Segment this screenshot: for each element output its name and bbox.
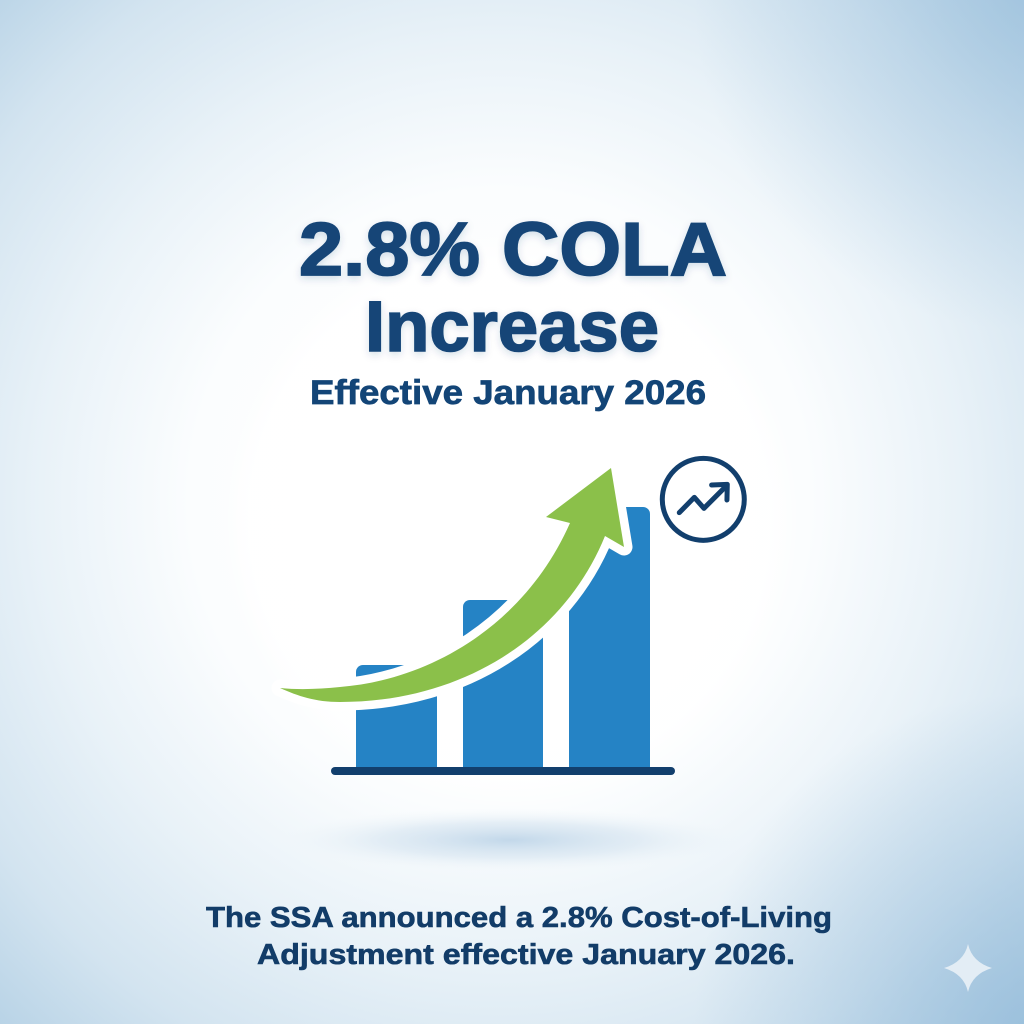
soft white glow behind chart: [220, 230, 800, 810]
bar 3: [569, 507, 650, 767]
icon: sparkle: [944, 944, 992, 992]
bottom-right corner tint: [694, 694, 1024, 1024]
caption line 1: The SSA announced a 2.8% Cost-of-Living: [206, 902, 832, 934]
caption line 2: Adjustment effective January 2026.: [257, 939, 795, 971]
title line 2: Increase: [365, 288, 659, 367]
title line 1: 2.8% COLA: [299, 207, 727, 291]
bar chart with growth arrow: [280, 468, 675, 775]
floor shadow under chart: [275, 808, 745, 872]
bar 2: [463, 600, 543, 767]
subtitle: Effective January 2026: [310, 374, 706, 412]
growth arrow: [280, 468, 624, 702]
top-right corner tint: [694, 0, 1024, 330]
baseline: [331, 767, 675, 775]
bar 1: [356, 665, 437, 767]
icon: trend line in circle: [662, 458, 744, 540]
